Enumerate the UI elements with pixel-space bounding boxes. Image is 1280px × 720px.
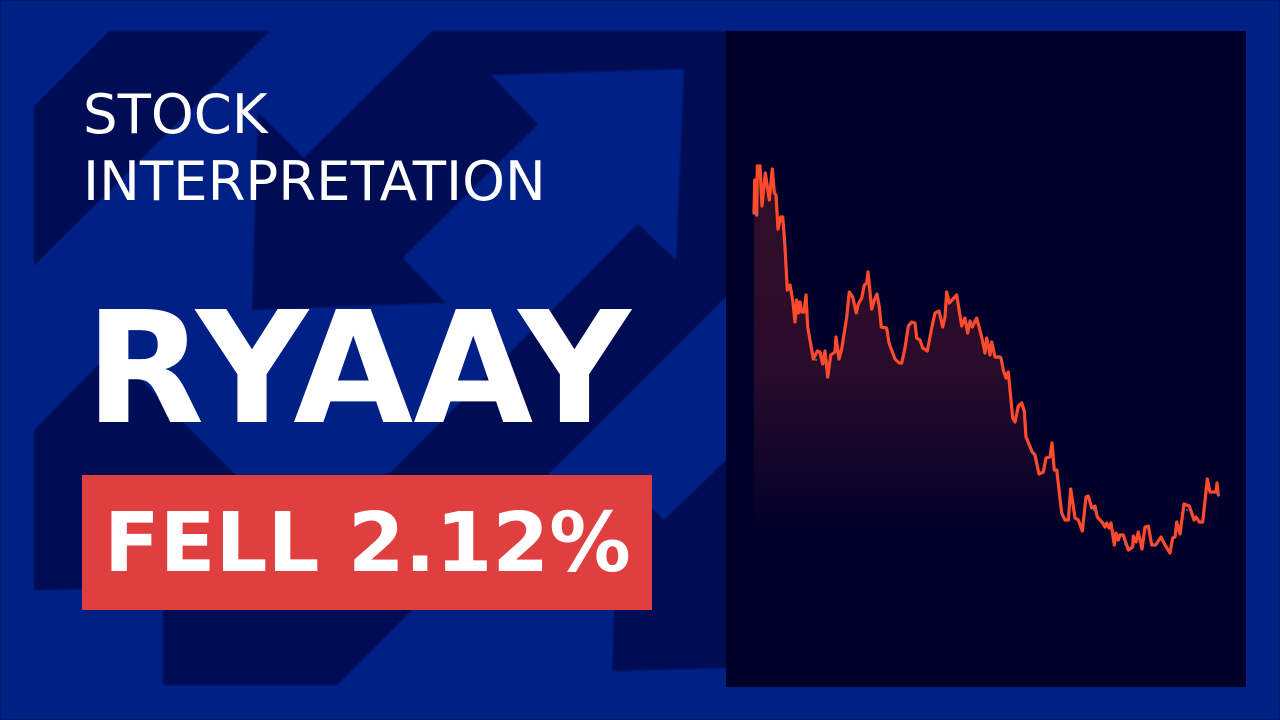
chart panel [726, 31, 1246, 687]
price area fill [754, 166, 1218, 553]
data point markers [753, 212, 1219, 546]
change badge [82, 475, 652, 610]
title: INTERPRETATION [83, 149, 546, 213]
ticker: RYAAY [85, 278, 632, 459]
panel background [726, 31, 1246, 687]
price line [754, 166, 1218, 553]
title: STOCK [83, 82, 269, 146]
title [83, 82, 546, 213]
background arrows [34, 31, 730, 685]
change badge: FELL 2.12% [104, 496, 631, 591]
